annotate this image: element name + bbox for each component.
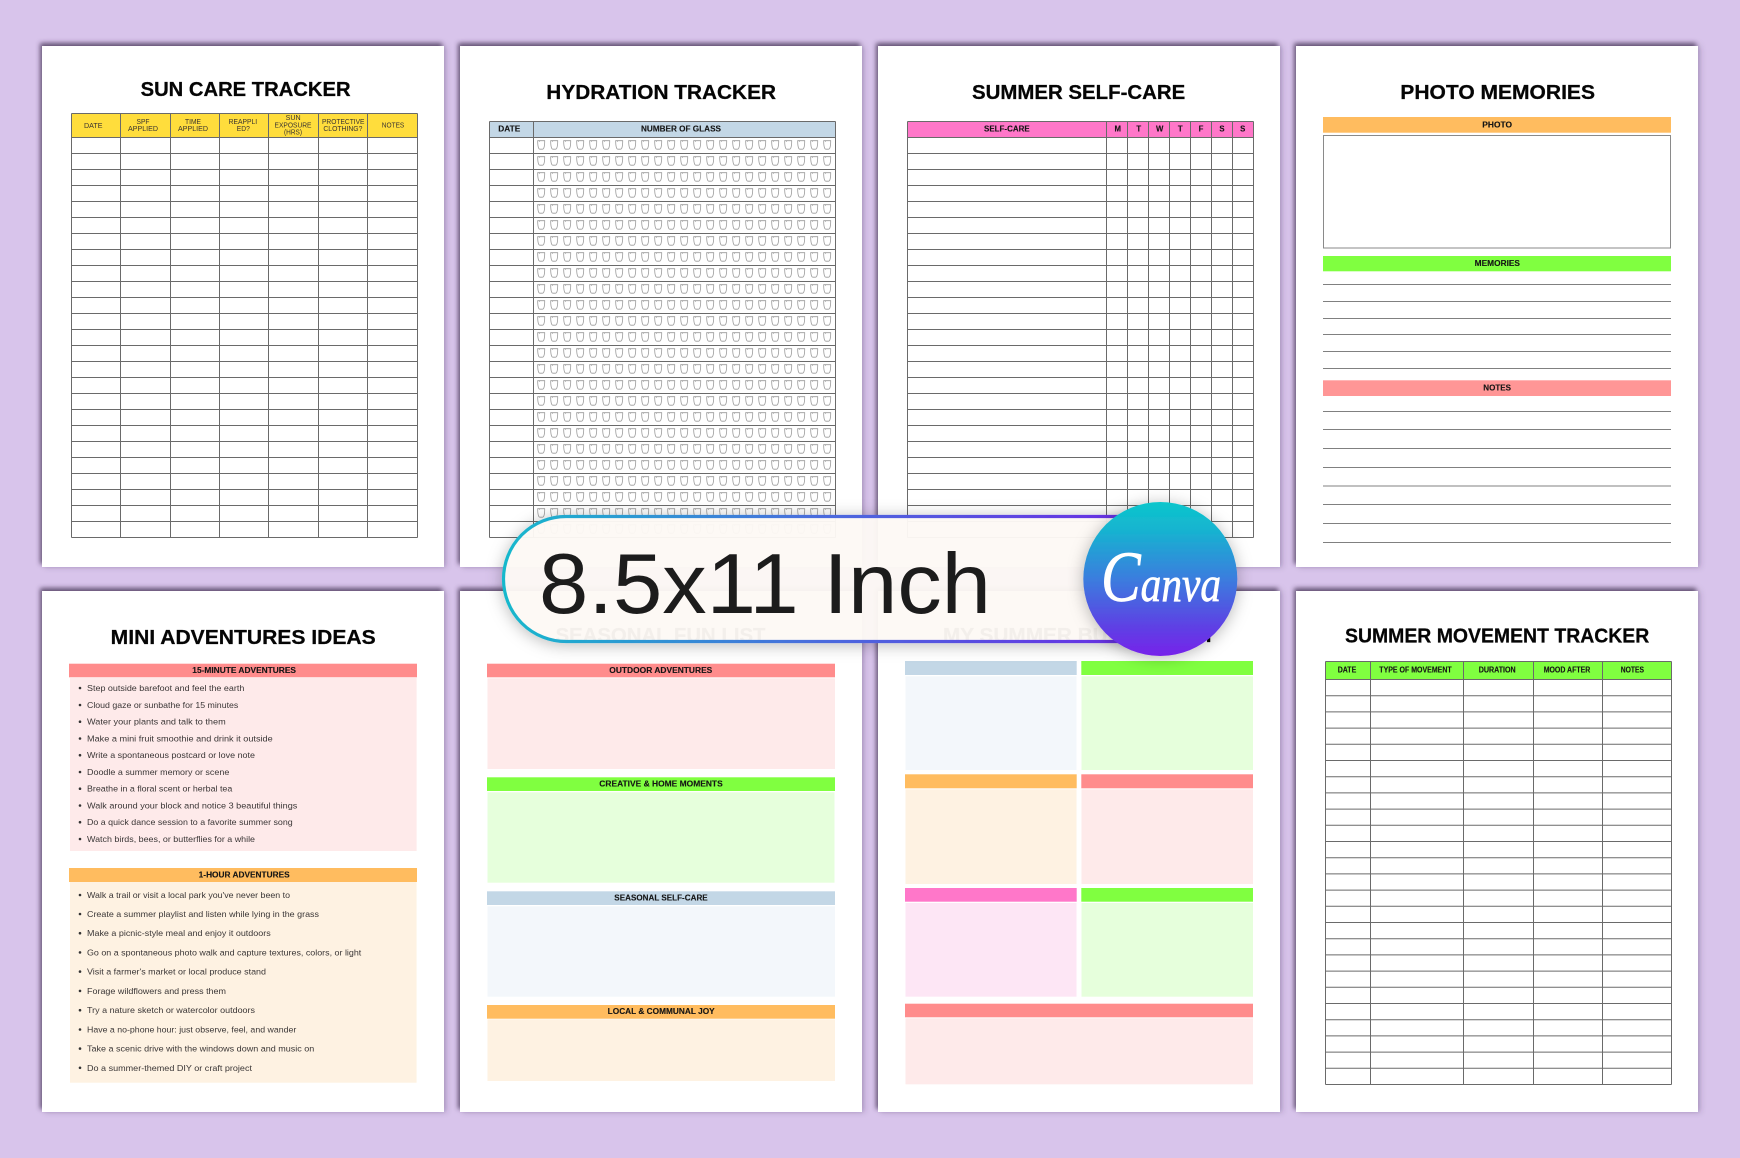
section panel: creative and home moments (488, 792, 834, 883)
list: 1-hour adventures: Go on a spontaneous photo walk and capture textures, colors, or light (87, 947, 362, 957)
column labels: self-care and days: F (1199, 125, 1204, 134)
writing lines: memories (1323, 284, 1671, 368)
section panel: outdoor adventures (488, 678, 835, 769)
list: 1-hour adventures: Take a scenic drive with the windows down and music on (87, 1044, 315, 1054)
table header: self-care (908, 122, 1254, 138)
list: 15-minute adventures: Doodle a summer memory or scene (87, 767, 230, 777)
section bar: creative and home moments (487, 777, 835, 791)
section label: seasonal self-care: SEASONAL SELF-CARE (614, 894, 708, 902)
column labels: self-care and days: S (1240, 125, 1245, 134)
glass icons: hydration (534, 138, 834, 538)
section label: local and communal joy: LOCAL & COMMUNAL JOY (608, 1007, 716, 1016)
section bar: seasonal self-care (487, 891, 835, 905)
list: 1-hour adventures: Have a no-phone hour: just observe, feel, and wander (87, 1024, 296, 1034)
panel: sun care tracker (42, 46, 444, 567)
column labels: self-care and days: T (1136, 125, 1141, 134)
list: 15-minute adventures: Breathe in a floral scent or herbal tea (87, 784, 233, 794)
photo frame (1324, 136, 1670, 248)
column labels: movement: DURATION (1479, 666, 1516, 675)
column labels: sun care: SUN (286, 113, 301, 122)
block: blue (905, 661, 1077, 770)
section panel: local and communal joy (488, 1019, 835, 1081)
list: 15-minute adventures: Write a spontaneous postcard or love note (87, 750, 255, 760)
title: my summer bucket list: MY SUMMER BUCKET LIST (943, 625, 1215, 647)
column labels: movement: DATE (1338, 666, 1356, 675)
writing lines: notes (1323, 412, 1671, 542)
list: 1-hour adventures: Forage wildflowers and press them (87, 986, 226, 996)
section label: creative and home moments: CREATIVE & HOME MOMENTS (599, 780, 723, 788)
list: 15-minute adventures: Walk around your block and notice 3 beautiful things (87, 800, 297, 810)
section label: memories: MEMORIES (1475, 259, 1520, 268)
block: green bottom (1081, 888, 1253, 997)
title: photo memories: PHOTO MEMORIES (1400, 82, 1595, 104)
title: seasonal fun list: SEASONAL FUN LIST (556, 625, 766, 647)
column labels: sun care (84, 113, 404, 137)
section bar: 1-hour adventures (69, 868, 417, 882)
column labels: sun care: PROTECTIVE (322, 117, 365, 126)
list: 15-minute adventures: Cloud gaze or sunbathe for 15 minutes (87, 700, 238, 710)
block: pink (905, 888, 1077, 997)
column labels: sun care: APPLIED (128, 124, 158, 133)
section bar: 15-minute adventures (69, 664, 417, 677)
section panel: 15-minute adventures (70, 678, 417, 851)
column labels: sun care: APPLIED (178, 124, 208, 133)
banner: size label (504, 516, 1204, 642)
list: 15-minute adventures: Do a quick dance session to a favorite summer song (87, 817, 293, 827)
panel: hydration tracker (460, 46, 862, 567)
table header: sun care (72, 114, 418, 138)
section label: 1-hour adventures: 1-HOUR ADVENTURES (199, 871, 290, 880)
title: sun care tracker: SUN CARE TRACKER (141, 79, 351, 101)
section bar: local and communal joy (487, 1005, 835, 1019)
column labels: sun care: NOTES (382, 121, 404, 130)
panel: seasonal fun list (460, 591, 862, 1112)
column labels: movement: NOTES (1621, 666, 1644, 675)
section bar: memories (1323, 256, 1671, 271)
column label: date: DATE (498, 124, 520, 134)
column labels: sun care: EXPOSURE (274, 120, 312, 129)
column labels: self-care and days: M (1114, 125, 1121, 134)
badge: canva logo (1083, 502, 1237, 656)
block: red (1081, 774, 1253, 884)
title: summer movement tracker: SUMMER MOVEMENT TRACKER (1345, 626, 1650, 648)
column labels: self-care and days: T (1178, 125, 1183, 134)
table grid: movement (1326, 662, 1672, 1084)
list: 1-hour adventures (79, 890, 362, 1073)
section label: photo: PHOTO (1482, 120, 1512, 129)
column labels: sun care: ED? (237, 124, 250, 133)
list: 1-hour adventures: Do a summer-themed DIY or craft project (87, 1063, 253, 1073)
title: mini adventures ideas: MINI ADVENTURES IDEAS (111, 627, 376, 649)
section bar: outdoor adventures (487, 664, 835, 677)
column labels: sun care: SPF (136, 117, 150, 126)
list: 1-hour adventures: Walk a trail or visit a local park you've never been to (87, 890, 290, 900)
title: hydration tracker: HYDRATION TRACKER (546, 82, 777, 104)
table grid: sun care (72, 114, 418, 538)
table header: movement (1326, 662, 1672, 680)
column labels: sun care: CLOTHING? (323, 124, 362, 133)
list: 15-minute adventures (79, 683, 297, 844)
list: 15-minute adventures: Step outside barefoot and feel the earth (87, 683, 245, 693)
list: 1-hour adventures: Try a nature sketch or watercolor outdoors (87, 1005, 255, 1015)
column labels: self-care and days: SELF-CARE (984, 125, 1030, 134)
section panel: seasonal self-care (488, 906, 835, 997)
list: 1-hour adventures: Create a summer playlist and listen while lying in the grass (87, 909, 319, 919)
list: 1-hour adventures: Visit a farmer's market or local produce stand (87, 967, 266, 977)
column labels: movement: MOOD AFTER (1544, 666, 1591, 675)
column labels: self-care and days (984, 125, 1245, 134)
section label: 15-minute adventures: 15-MINUTE ADVENTURES (192, 666, 296, 675)
table grid: hydration (490, 122, 836, 538)
list: 15-minute adventures: Make a mini fruit smoothie and drink it outside (87, 733, 273, 743)
column labels: sun care: TIME (185, 117, 201, 126)
list: 1-hour adventures: Make a picnic-style meal and enjoy it outdoors (87, 928, 271, 938)
section label: notes: NOTES (1483, 384, 1511, 393)
column labels: movement: TYPE OF MOVEMENT (1379, 666, 1452, 675)
table header: hydration (490, 122, 836, 138)
column labels: self-care and days: S (1219, 125, 1225, 134)
block: red wide (905, 1004, 1253, 1084)
column labels: sun care: (HRS) (284, 128, 302, 137)
column labels: sun care: REAPPLI (229, 117, 257, 126)
list: 15-minute adventures: Water your plants and talk to them (87, 716, 226, 726)
banner text: 8.5x11 Inch (539, 537, 991, 632)
panel: summer self-care (878, 46, 1280, 567)
section label: outdoor adventures: OUTDOOR ADVENTURES (609, 666, 712, 675)
column label: number of glass: NUMBER OF GLASS (641, 124, 721, 134)
badge text: Canva (1101, 537, 1221, 617)
column labels: movement (1338, 666, 1644, 675)
panel: my summer bucket list (878, 591, 1280, 1112)
column labels: self-care and days: W (1156, 125, 1164, 134)
section bar: photo (1323, 117, 1671, 133)
section bar: notes (1323, 380, 1671, 396)
panel: photo memories (1296, 46, 1698, 567)
title: summer self-care: SUMMER SELF-CARE (972, 82, 1185, 104)
list: 15-minute adventures: Watch birds, bees, or butterflies for a while (87, 834, 255, 844)
section panel: 1-hour adventures (70, 882, 417, 1083)
block: orange (905, 774, 1077, 884)
block: green top (1081, 661, 1253, 770)
panel: summer movement tracker (1296, 591, 1698, 1112)
column labels: sun care: DATE (84, 121, 103, 130)
table grid: self-care (908, 122, 1254, 538)
panel: mini adventures ideas (42, 591, 444, 1112)
